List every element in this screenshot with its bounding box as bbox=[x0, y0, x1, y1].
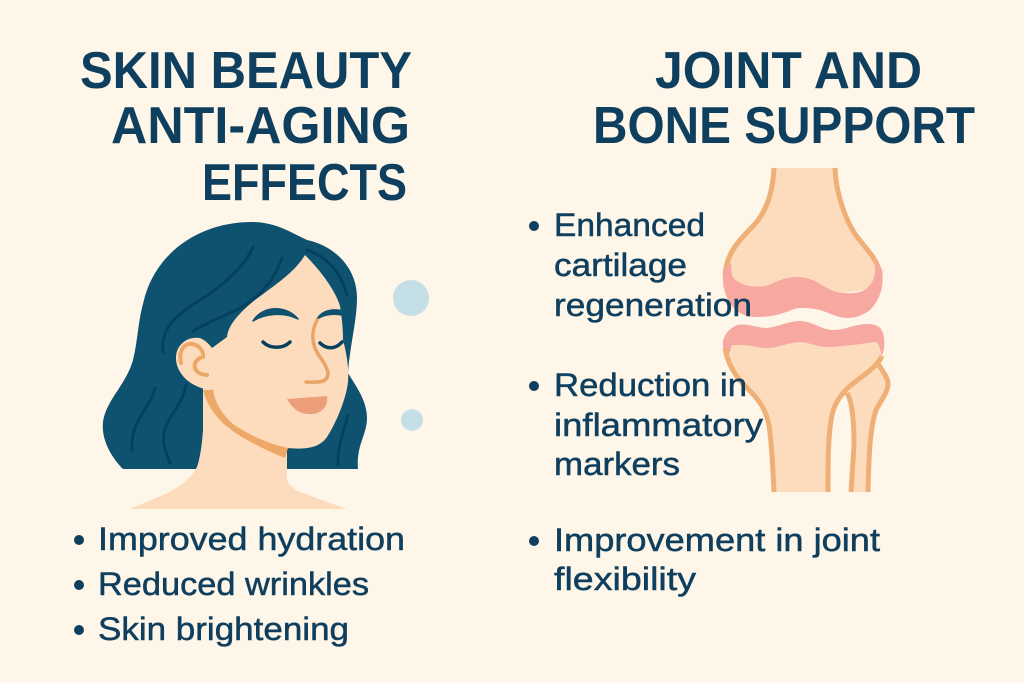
tibia bbox=[724, 340, 882, 492]
lips bbox=[287, 396, 327, 414]
femur bbox=[723, 168, 882, 300]
title: joint and bone support: BONE SUPPORT bbox=[593, 97, 975, 155]
tibia and fibula outlines bbox=[725, 348, 888, 492]
joint benefit: cartilage regeneration bbox=[529, 207, 752, 323]
illustration: woman with closed eyes bbox=[103, 222, 367, 509]
joint benefit: inflammatory markers bbox=[529, 367, 763, 482]
face bbox=[176, 255, 348, 449]
title: skin beauty anti-aging effects bbox=[80, 42, 412, 212]
joint benefit: inflammatory markers: inflammatory bbox=[554, 407, 763, 443]
skin benefits bullet list bbox=[74, 521, 405, 647]
illustration: knee joint bbox=[723, 168, 888, 492]
title: joint and bone support bbox=[593, 42, 975, 155]
water droplet small bbox=[401, 409, 423, 431]
joint benefit: flexibility: flexibility bbox=[554, 561, 696, 597]
ear detail bbox=[180, 344, 207, 375]
fibula bbox=[848, 362, 888, 492]
femur outline bbox=[725, 168, 880, 275]
nose bbox=[306, 320, 328, 382]
hair bbox=[103, 222, 367, 469]
skin benefits bullet list: Skin brightening bbox=[98, 611, 349, 647]
joint benefit: cartilage regeneration: cartilage bbox=[554, 247, 687, 283]
joint benefit: inflammatory markers: markers bbox=[554, 446, 680, 482]
joint benefit: inflammatory markers: Reduction in bbox=[554, 367, 747, 403]
jaw line bbox=[203, 390, 288, 458]
hair strands bbox=[132, 247, 348, 464]
skin benefits bullet list: Improved hydration bbox=[98, 521, 405, 557]
title: skin beauty anti-aging effects: EFFECTS bbox=[202, 154, 407, 212]
joint benefit: cartilage regeneration: regeneration bbox=[554, 287, 752, 323]
joint benefit: flexibility bbox=[529, 522, 880, 597]
neck and shoulders bbox=[130, 385, 347, 509]
lower cartilage bbox=[723, 321, 884, 356]
title: skin beauty anti-aging effects: ANTI-AGING bbox=[111, 97, 410, 155]
upper cartilage bbox=[723, 258, 883, 318]
closed eyes bbox=[263, 342, 342, 348]
joint benefit: flexibility: Improvement in joint bbox=[554, 522, 880, 558]
water droplet large bbox=[393, 280, 429, 316]
joint benefit: cartilage regeneration: Enhanced bbox=[554, 207, 705, 243]
title: joint and bone support: JOINT AND bbox=[655, 42, 922, 100]
title: skin beauty anti-aging effects: SKIN BEAUTY bbox=[80, 42, 412, 100]
skin benefits bullet list: Reduced wrinkles bbox=[98, 566, 369, 602]
eyebrows bbox=[253, 309, 343, 321]
